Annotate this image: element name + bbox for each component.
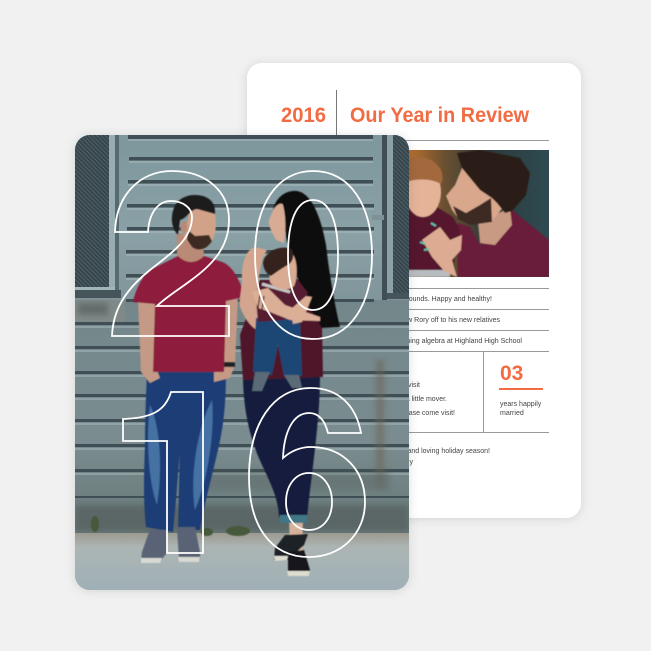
panel: front photo card <box>75 135 409 590</box>
numeral 0 <box>255 171 372 339</box>
list text <box>403 296 522 466</box>
baby face <box>409 178 442 218</box>
man face <box>184 208 216 249</box>
woman hair <box>272 191 340 328</box>
numeral 1 <box>123 392 203 553</box>
list text: visit <box>408 382 420 389</box>
man arms <box>138 300 160 383</box>
header divider <box>336 90 337 135</box>
right mesh panel <box>382 135 387 300</box>
heading: our year in review: Our Year in Review <box>350 104 530 127</box>
father beard <box>453 198 492 225</box>
man beard <box>187 230 212 249</box>
man ear <box>180 221 188 233</box>
list text: and loving holiday season! <box>407 448 490 455</box>
baby body <box>409 208 460 270</box>
rules <box>400 140 549 433</box>
father shirt <box>457 210 549 277</box>
father face <box>446 168 505 224</box>
panel: back card year in review <box>247 63 581 518</box>
list text: ow Rory off to his new relatives <box>403 317 500 324</box>
woman ankle <box>288 522 304 552</box>
woman arm <box>238 246 279 346</box>
list text: ease come visit! <box>405 410 455 417</box>
man shirt <box>133 256 245 372</box>
list text: thing algebra at Highland High School <box>404 338 522 345</box>
stat: years married: 03 <box>500 362 523 385</box>
left mesh panel <box>75 135 109 287</box>
man jeans <box>144 372 226 532</box>
hands <box>422 227 462 277</box>
baby legs <box>253 316 302 376</box>
baby head <box>268 251 297 289</box>
baby socks <box>252 372 302 391</box>
outlined numerals 2016 <box>112 171 372 557</box>
stat: years married <box>499 362 543 417</box>
man hair <box>172 195 215 235</box>
woman dress <box>240 280 323 380</box>
woman jeans <box>243 376 320 517</box>
stat: years married: married <box>500 410 524 417</box>
father hair <box>457 150 530 213</box>
man neck <box>177 233 204 263</box>
list text: pounds. Happy and healthy! <box>405 296 492 303</box>
stat: years married: years happily <box>500 401 542 408</box>
jeans highlights <box>148 400 213 510</box>
baby shirt <box>256 276 308 322</box>
inset photo: father and baby <box>400 150 549 277</box>
woman face <box>269 204 285 243</box>
numeral 6 <box>249 388 365 557</box>
photo: wall background <box>75 135 409 535</box>
baby arm and mother's forearm <box>252 288 320 321</box>
father neck <box>478 208 512 245</box>
infographic: year in review card mockup <box>72 61 584 594</box>
heading: year: 2016 <box>281 104 326 127</box>
photo: ground <box>75 516 409 590</box>
baby hair <box>409 157 443 184</box>
stains <box>75 303 409 531</box>
list text: y <box>410 459 414 466</box>
photo: man <box>133 195 245 563</box>
man shoes <box>141 527 200 561</box>
list text: a little mover. <box>406 396 447 403</box>
woman shoes <box>274 534 308 560</box>
photo: woman and baby <box>240 191 340 576</box>
numeral 2 <box>112 171 229 336</box>
